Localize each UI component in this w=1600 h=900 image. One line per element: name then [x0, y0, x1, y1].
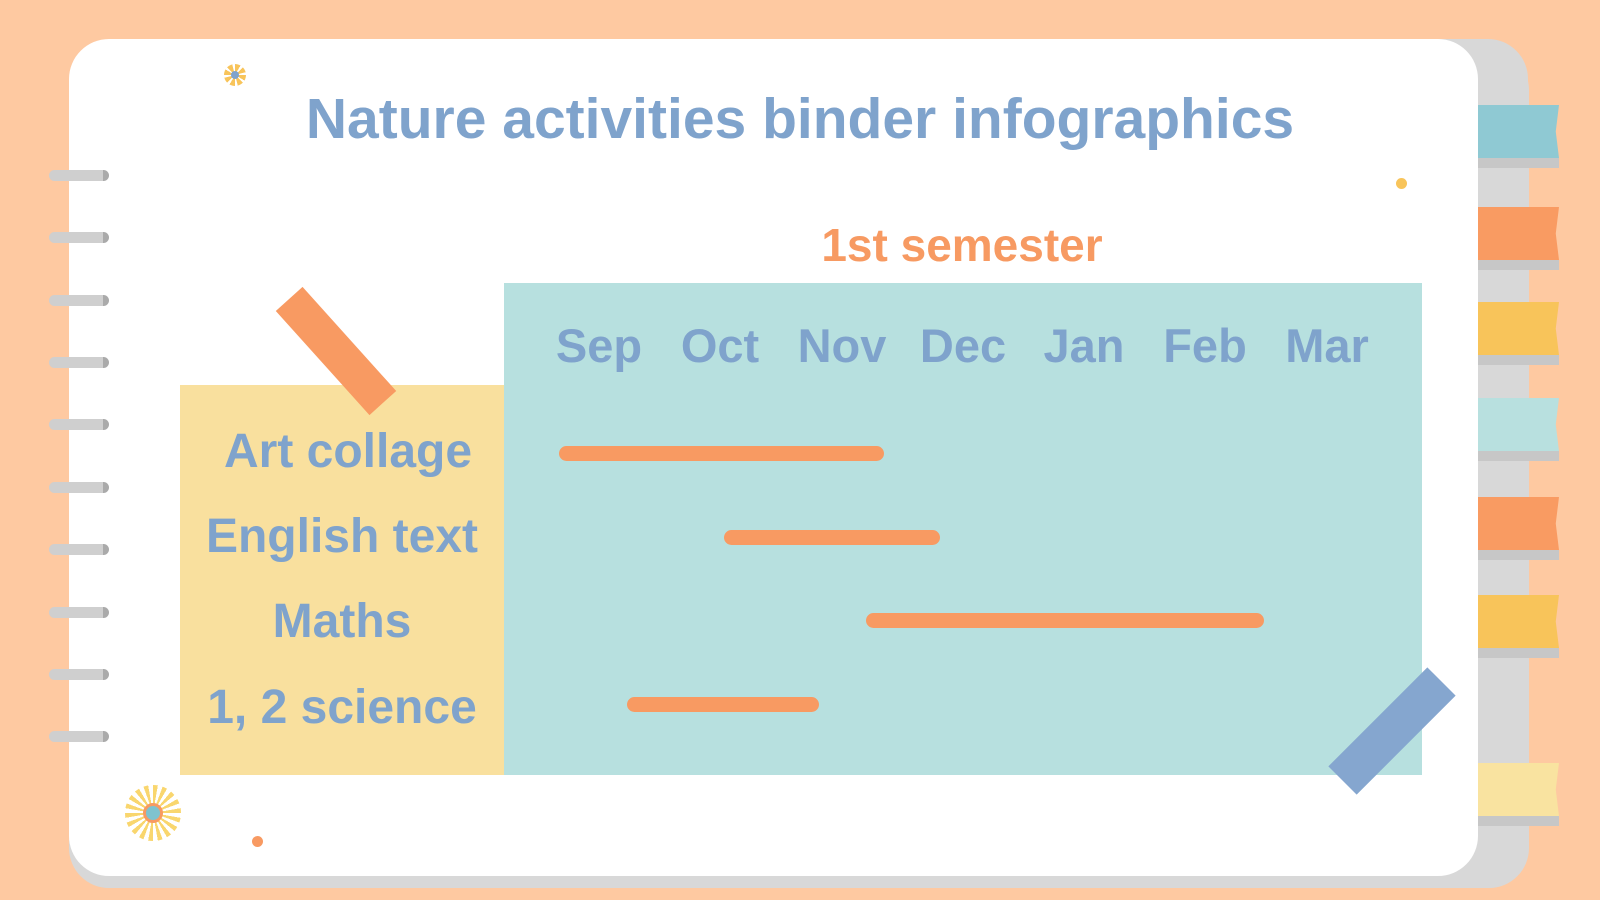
binder rings: [49, 170, 109, 742]
semester heading: 1st semester: [821, 219, 1103, 271]
month headers: [556, 319, 1369, 372]
month headers: Dec: [920, 319, 1006, 372]
activity labels: 1, 2 science: [207, 681, 477, 734]
month headers: Sep: [556, 319, 642, 372]
timeline panel: [504, 283, 1422, 775]
activity labels: Art collage: [224, 425, 472, 478]
gantt bars: [559, 446, 1264, 712]
dots: [1396, 178, 1407, 189]
activity labels: English text: [206, 510, 478, 563]
month headers: Mar: [1285, 319, 1369, 372]
orange tape: [276, 287, 396, 415]
blue tape: [1328, 667, 1456, 795]
icon: big flower: [125, 785, 181, 841]
month headers: Jan: [1044, 319, 1124, 372]
title: Nature activities binder infographics: [306, 87, 1294, 151]
activity labels: Maths: [273, 595, 411, 648]
month headers: Oct: [681, 319, 759, 372]
icon: small flower: [224, 64, 246, 86]
activity labels: [206, 425, 478, 734]
tabs: [1478, 105, 1559, 826]
month headers: Feb: [1163, 319, 1247, 372]
label panel: [180, 385, 504, 775]
back page: [1380, 39, 1528, 887]
month headers: Nov: [798, 319, 886, 372]
